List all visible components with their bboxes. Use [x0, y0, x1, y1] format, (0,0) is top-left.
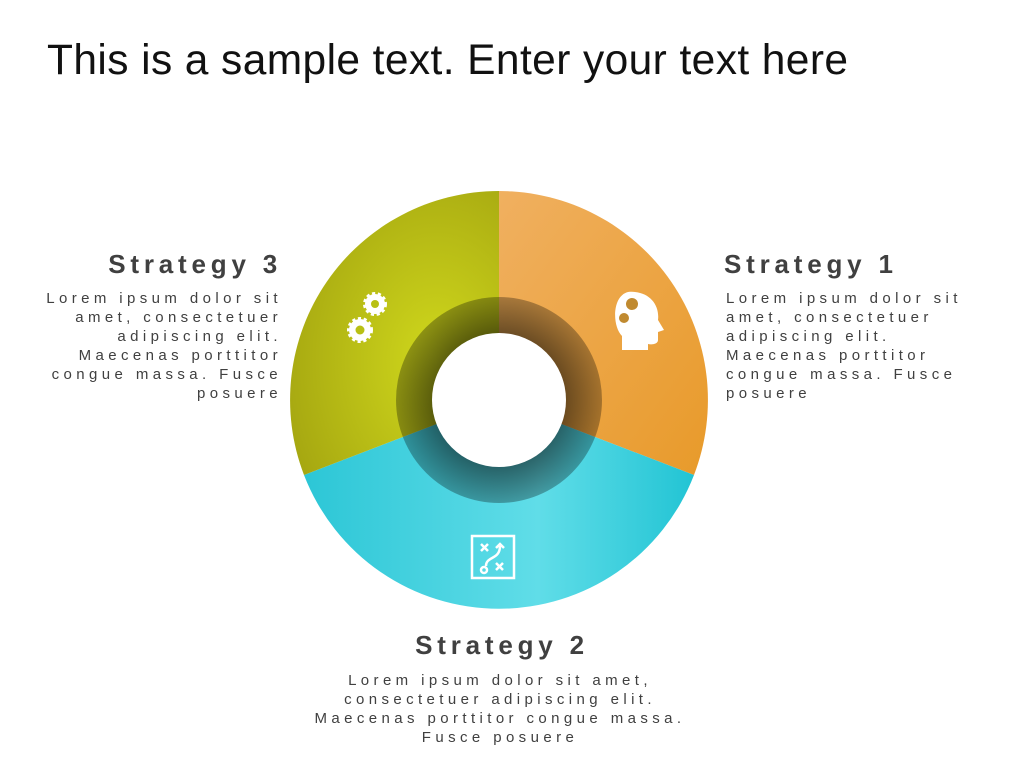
icon: strategy board — [472, 536, 514, 578]
text: strategy 1: congue massa. Fusce — [726, 366, 956, 383]
text: strategy 2: Fusce posuere — [422, 729, 578, 746]
text: strategy 1: Maecenas porttitor — [726, 347, 929, 364]
text: strategy 3: amet, consectetuer — [75, 309, 282, 326]
text: strategy 1: amet, consectetuer — [726, 309, 933, 326]
text: strategy 2: Maecenas porttitor congue massa. — [315, 710, 685, 727]
text: strategy 3: adipiscing elit. — [117, 328, 282, 345]
heading: strategy 1: Strategy 1 — [724, 249, 898, 279]
title: This is a sample text. Enter your text here — [47, 37, 848, 84]
heading: strategy 3: Strategy 3 — [108, 249, 282, 279]
text: strategy 2 — [315, 672, 685, 746]
inner dark ring — [396, 297, 602, 503]
segment: strategy 3 olive — [290, 191, 499, 475]
center hole — [432, 333, 566, 467]
text: strategy 2: consectetuer adipiscing elit. — [344, 691, 656, 708]
text: strategy 3: posuere — [197, 385, 282, 402]
text: strategy 1: adipiscing elit. — [726, 328, 891, 345]
text: strategy 3: Lorem ipsum dolor sit — [46, 290, 282, 307]
heading: strategy 2: Strategy 2 — [415, 630, 589, 660]
text: strategy 1: posuere — [726, 385, 811, 402]
text: strategy 1: Lorem ipsum dolor sit — [726, 290, 962, 307]
text: strategy 3 — [46, 290, 282, 402]
text: strategy 3: congue massa. Fusce — [52, 366, 282, 383]
segment: strategy 2 cyan — [304, 400, 694, 609]
icon: head with gears — [615, 292, 664, 350]
text: strategy 2: Lorem ipsum dolor sit amet, — [348, 672, 652, 689]
text: strategy 3: Maecenas porttitor — [79, 347, 282, 364]
icon: gears — [349, 294, 385, 341]
text: strategy 1 — [726, 290, 962, 402]
segment: strategy 1 orange — [499, 191, 708, 475]
